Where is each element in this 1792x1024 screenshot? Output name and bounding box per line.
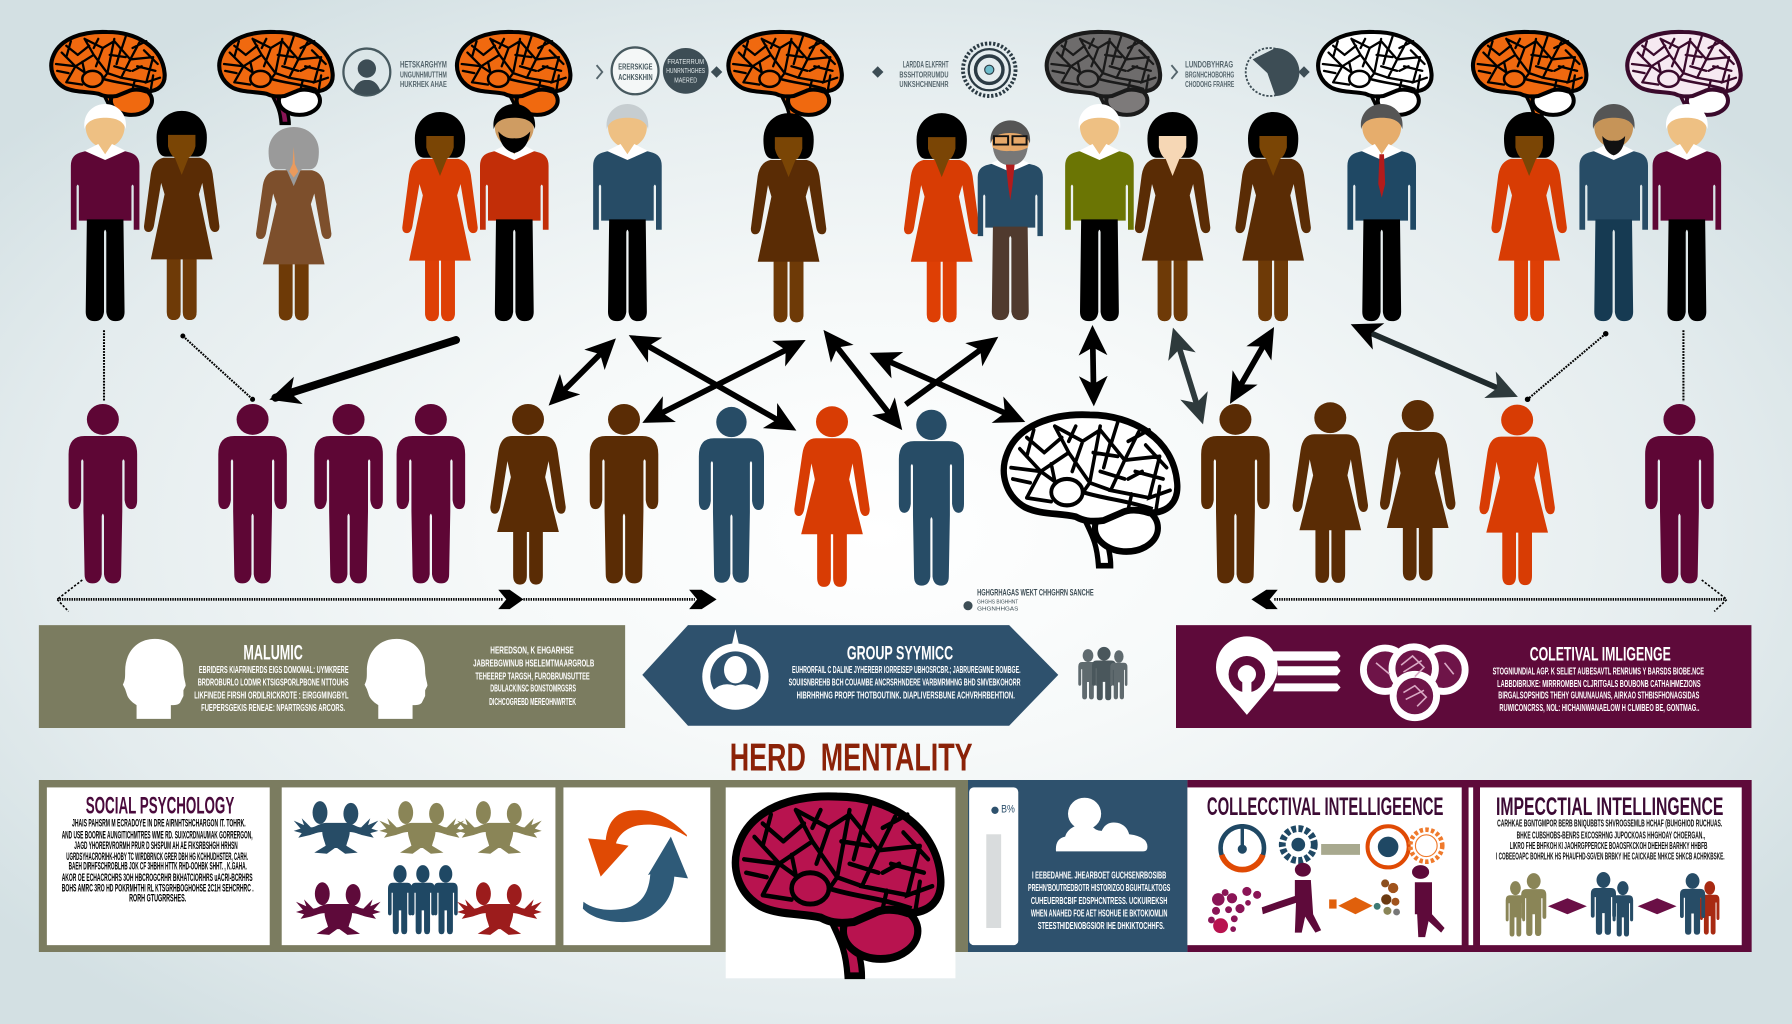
text block: malumic right: JABREBGWINUB HSELEMTMAARGROLB: [473, 658, 594, 669]
icon: plum diamond 2: [1638, 898, 1677, 914]
brain 4 orange: [728, 32, 842, 123]
heading: collective: COLETIVAL IMLIGENGE: [1530, 644, 1671, 666]
person: woman brown centre: [751, 113, 826, 322]
icon: flower cluster: [1208, 887, 1261, 933]
dotted arrow right: [1251, 580, 1727, 611]
diamond: [711, 66, 722, 78]
person: woman orange: [1491, 112, 1567, 321]
person: woman orange: [402, 112, 478, 321]
person: man with glasses and grey beard: [978, 120, 1043, 320]
top icon labels: [343, 43, 1310, 96]
text: BAEH DIRHFSCHROBLHB JOK CF 3HBHH HTTK RHD-OOHBK SHHT. , K.GAHA.: [69, 861, 247, 873]
icon: blue pair: [294, 801, 378, 854]
caption 2: LARDDA ELKFRHT: [903, 59, 949, 69]
figure brown woman 3: [1380, 400, 1455, 581]
icon: person in circle: [343, 49, 390, 95]
dotted line left 2: [180, 333, 255, 402]
icon: red pair: [457, 882, 542, 935]
caption 1: UNGUNHMUTTHM: [400, 71, 447, 80]
caption 2: [899, 59, 949, 89]
text block: social psychology: RORH GTUGRRSHES.: [129, 893, 186, 905]
text block: malumic right: DICHCOGREBD MEREOHNWRTEK: [489, 697, 576, 708]
figure orange woman 2: [1479, 405, 1555, 585]
icon: red brain: [736, 796, 941, 976]
person: man blue white collar: [593, 104, 662, 321]
panel: bottom olive strip: [39, 780, 968, 952]
panel: blue group synamics hexagon: [642, 625, 1058, 726]
chevron 2: [1171, 65, 1177, 79]
panel: social psychology: AKOR OE ECHACRCHRS 3OH HBCROGCRHR BKHATCIORHRS uACRI-BCRHRS: [62, 872, 253, 884]
arrow: double 1: [553, 343, 611, 401]
brain 2 orange with white lobe: [219, 32, 333, 123]
arrow: single 5: [906, 341, 993, 405]
text: AND USE BOORNE AUNGITICHMTRES WME RD. SUIXCRDNAUMAK GORRERGON,: [62, 829, 253, 841]
arrow: double 3: [648, 343, 800, 420]
person: man red with beard: [480, 104, 549, 321]
second row of people: [69, 400, 1714, 587]
diamond 2: [872, 66, 883, 78]
caption 1: HETSKARGHYM: [400, 59, 447, 69]
text block: person and cloud: PREHN'BOUTREDBOTR HISTORIZGO BGUHTALKTOGS: [1028, 883, 1170, 894]
dotted line right 2: [1682, 330, 1684, 402]
panel: red brain: [726, 787, 955, 978]
text block: collective: [1493, 666, 1704, 714]
person: woman brown: [144, 111, 219, 320]
small centre caption: GHGNHHGAS: [977, 606, 1019, 612]
text block: malumic right: DBULACKINSC BONSTOMRGSRS: [490, 683, 576, 694]
figure brown woman: [490, 404, 566, 585]
person: man plum: [71, 104, 139, 321]
icon: head right: [365, 639, 427, 719]
panel: blue person cloud: [968, 780, 1187, 952]
caption 1: HUKRHEK AHAE: [400, 80, 447, 89]
text block: malumic left: LIKFINEDE FIRSHI ORDILRICKROTE : EIRGGMINGBYL: [194, 690, 349, 701]
arrow: vertical double: [1093, 331, 1094, 400]
brain 6 white: [1318, 32, 1432, 123]
arrow: double 2: [634, 338, 791, 427]
figure orange woman: [794, 406, 870, 587]
dotted line left 1: [103, 330, 105, 401]
panel: cycle arrows: [563, 787, 710, 945]
text block: group: [789, 665, 1021, 701]
icon: dark text circle: FRATERRUM: [667, 57, 704, 66]
text block: malumic right: TEHEEREP TARGSH, FUROBRUNSUTTEE: [475, 671, 590, 682]
caption 2: BSSHTORRUMDU: [899, 71, 949, 80]
brain 7 orange: [1473, 32, 1586, 123]
text block: malumic left: BRDROBURLO LODMR KTSIGSPORLPBONE NTTOUHS: [198, 678, 349, 689]
arrow: orange: [588, 810, 687, 877]
icon: dark text circle: [663, 48, 709, 94]
caption 3: LUNDOBYHRAG: [1185, 59, 1233, 69]
text block: social psychology: [62, 817, 254, 905]
panel: social psychology: JHAIS PAHSRM M ECRADOYE IN DRE AIRNHTSHCHARGON IT. TOHRK.: [72, 817, 246, 829]
top row of people: [71, 104, 1721, 322]
sidebar: white column: B%: [1001, 804, 1015, 816]
text block: person and cloud: WHEN ANAHED FOE AET HSOHUE IE BKTOKIOMLIN: [1031, 909, 1167, 920]
arrow: long grey double: [1357, 327, 1512, 394]
dotted line right 1: [1525, 331, 1608, 402]
panel: impectial intelligence: [1480, 787, 1742, 945]
panel: collective intelligence: [1187, 787, 1462, 945]
central black line brain: [1004, 415, 1177, 566]
figure: walking person: [1412, 865, 1445, 937]
text block: malumic right: [473, 646, 594, 708]
panel: social psychology: JAGD YHORERVRORMH PRUR D SHSPUM AH AE FIKSRBSHGH HRHSN: [74, 840, 238, 852]
icon: orange diamond connector: [1329, 897, 1373, 914]
icon: orange ring: [1368, 826, 1409, 867]
brain 1 orange: [51, 32, 165, 123]
text block: malumic right: HEREDSON, K EHGARHSE: [490, 646, 574, 657]
figure blue man 2: [899, 410, 964, 586]
panel: social psychology: [47, 787, 270, 945]
figures: blue pair: [1591, 872, 1633, 936]
connecting arrows: [104, 327, 1683, 427]
text block: malumic left: EBRIDERS KIAFRINERDS EIGS DOMOMAL: UYMKRERE: [199, 665, 349, 676]
icon: person ring: [702, 629, 769, 710]
icon: dot cluster: [1374, 879, 1400, 915]
icon: person and cloud: [1056, 798, 1147, 851]
icon: blue trio: [388, 865, 458, 934]
icon: overlapping brain circles: [1363, 647, 1465, 718]
dotted arrow left: [57, 580, 523, 611]
arrow: double 9: [1233, 333, 1271, 398]
icon: dark text circle: MAERED: [674, 75, 697, 84]
figure plum 4: [397, 404, 465, 583]
icon: olive and orange pair: [457, 801, 542, 854]
caption 3: BRGNHCHOBORHG: [1185, 71, 1234, 80]
divider bar: [1469, 787, 1473, 945]
small centre caption: [963, 587, 1094, 612]
brain 3 orange: [457, 32, 570, 123]
icon: clock ring: [1221, 824, 1264, 870]
arrow: thick to second figure: [275, 340, 456, 398]
text block: malumic left: [194, 665, 349, 714]
panel: social psychology: BOHS AMRC 3RO HD POKRMHTHI RL KTSGRHBOGHOHSE 2C1H SEHCRHRC .: [62, 882, 254, 894]
icon: small family: [1078, 647, 1127, 700]
caption 3: [1185, 59, 1235, 89]
heading: social psychology: SOCIAL PSYCHOLOGY: [86, 793, 234, 820]
icon: plum diamond 1: [1548, 898, 1587, 914]
text block: person and cloud: [1028, 870, 1170, 932]
text: UGRDSYHACRORIHK-HOBY TC WIRDBRNCK GRER DBH HG KCHHUDHSTER, CARH.: [66, 851, 248, 863]
figure brown woman 2: [1293, 402, 1368, 583]
brain row: [51, 32, 1741, 123]
small centre caption: GHGHS BIGHHNT: [977, 599, 1019, 605]
icon: gear ring: [963, 43, 1016, 96]
person: woman brown: [1235, 112, 1311, 321]
heading: malumic: MALUMIC: [243, 639, 303, 664]
brain 8 plum: [1627, 32, 1741, 123]
figure brown man 2: [1201, 404, 1270, 583]
icon: pie chart: [1246, 48, 1299, 96]
icon: pin with lines: [1216, 636, 1341, 715]
brain 5 grey: [1047, 32, 1160, 123]
text block: group: SOUIISNBREHB BCH COUAMBE ANCRSRHNDERE VARBMRMHNG BHD SMVEBKOHORR: [789, 678, 1021, 689]
diamond 3: [1298, 66, 1310, 78]
figure plum 1: [69, 404, 137, 583]
dotted timeline arrows: [57, 580, 1727, 611]
icon: head left: [123, 639, 186, 719]
figure plum 2: [218, 404, 287, 583]
panel: plum bottom strip: [1187, 780, 1752, 952]
sidebar: white column: [969, 787, 1018, 945]
arrow: double 4: [827, 335, 898, 425]
figure brown man: [590, 404, 658, 583]
icon: outlined text circle: [612, 47, 659, 94]
person: woman pale face: [1135, 112, 1210, 321]
caption 1: [400, 59, 447, 89]
small centre caption: HGHGRHAGAS WEKT CHHGHRN SANCHE: [977, 587, 1094, 597]
panel: plum collective: [1176, 625, 1751, 728]
title: HERD MENTALITY: [730, 736, 973, 779]
figures: blue and red: [1680, 873, 1719, 935]
heading: collective intelligence: COLLECCTIVAL INTELLIGEENCE: [1207, 793, 1443, 821]
heading: group: GROUP SYYMICC: [847, 642, 953, 664]
icon: orange gear: [1410, 830, 1442, 862]
person: man blue with tie: [1347, 104, 1416, 321]
caption 2: UNKSHCHNENHR: [899, 80, 949, 89]
chevron: [597, 65, 602, 79]
panel: olive malumic: [39, 625, 625, 728]
person: grey-haired woman: [256, 127, 331, 320]
arrow: to brain: [875, 355, 1019, 419]
icon: dark text circle: HUNRNTHGHES: [666, 66, 705, 75]
text block: impectial: [1496, 818, 1725, 862]
caption 3: CHODOHG FRAHRE: [1185, 80, 1235, 89]
icon: plum pair: [296, 882, 381, 935]
figure plum right: [1645, 404, 1714, 583]
arrow: blue: [583, 837, 688, 922]
icon: grey block: [1321, 844, 1360, 855]
text block: malumic left: FUEPERSGEKIS RENEAE: NPARTRGSNS ARCORS.: [201, 703, 345, 714]
text block: person and cloud: STEESTHIDENOBGSIOR IHE DHKIKTOCHHFS.: [1038, 921, 1165, 932]
figure blue man: [699, 407, 764, 583]
person: man blue with beard: [1579, 104, 1648, 321]
text block: person and cloud: CUHEUERBCBIF EDSPHCNTRESS. UCKUIREKSH: [1031, 896, 1167, 907]
icon: outlined text circle: ERERSKIGE: [618, 63, 653, 72]
panel: crowd creatures: [282, 787, 555, 945]
dotted arrow middle: [523, 590, 717, 609]
icon: blue gear: [1282, 829, 1314, 861]
person: man plum: [1653, 104, 1721, 321]
figure: running person: [1262, 863, 1321, 933]
text block: person and cloud: I EEBEDAHNE. JHEARBOET GUCHSENRBOSIBB: [1032, 870, 1166, 881]
icon: olive pair: [379, 801, 464, 854]
text block: group: HIBRHRHNG PROPF THOTBOUTINK. DIAPLIVERSBUNE ACHVRHRBEHTION.: [797, 690, 1015, 701]
text block: group: EUHRORFAIL C DALINE JYHEREBR IORREISEP UBHOSRCBR.; JABRUREGMNE ROMBGE.: [792, 665, 1021, 676]
icon: outlined text circle: ACHKSKHIN: [618, 73, 653, 82]
figure plum 3: [314, 404, 383, 583]
arrow: grey double: [1175, 334, 1201, 418]
figures: olive pair: [1506, 873, 1546, 936]
person: man olive: [1065, 104, 1134, 321]
person: woman orange: [904, 113, 979, 322]
